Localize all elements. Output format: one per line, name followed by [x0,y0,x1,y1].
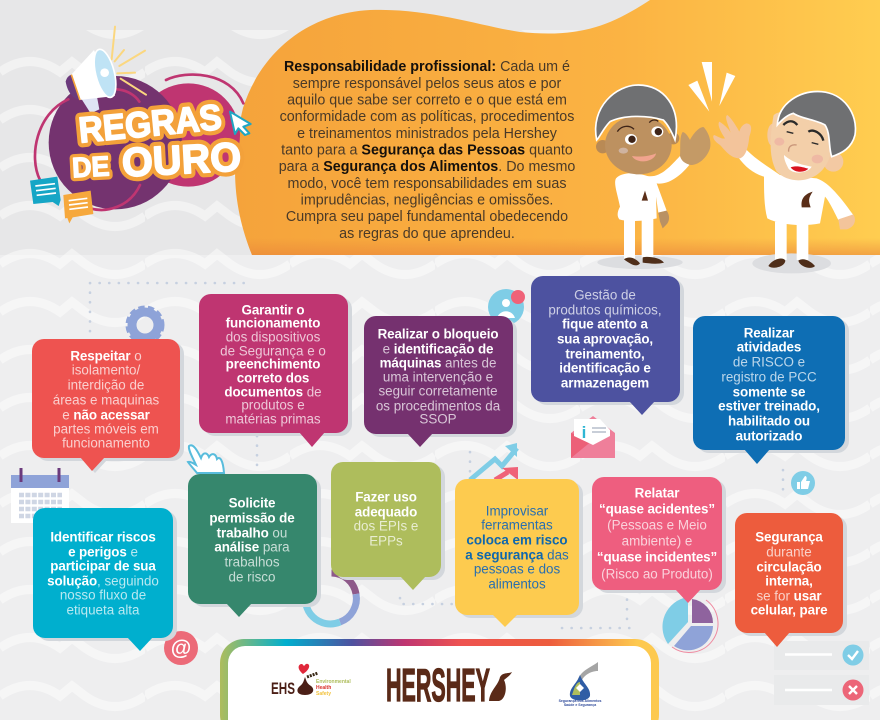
panel: Gestão de produtos químicos: fique atento a [562,316,648,332]
logo: EHS: Health [316,685,331,691]
logo: Segurança [559,662,601,707]
panel: Realizar atividades de risco: somente se [733,384,805,400]
panel: Relatar quase acidentes: “quase acidentes” [599,502,715,516]
panel: Gestão de produtos químicos: Gestão de [574,288,636,302]
icon: cursor arrow [230,112,251,135]
intro text: Responsabilidade profissional: Cumpra seu papel fundamental obedecendo [286,209,568,225]
intro text: Responsabilidade profissional: Responsabilidade profissional: Cada um é [284,59,570,75]
panel: Fazer uso adequado: EPPs [369,534,403,548]
panel: Gestão de produtos químicos: armazenagem [561,376,649,390]
panel: Improvisar ferramentas [455,479,583,627]
panel: Solicite permissão: permissão de [209,510,295,526]
panel: Garantir o funcionamento: correto dos [237,370,309,386]
panel: Realizar atividades de risco [693,316,849,464]
panel: Realizar atividades de risco: habilitado ou [728,414,810,428]
heading: Regras de Ouro: OURO [121,133,242,186]
panel: Garantir o funcionamento: funcionamento [226,316,320,330]
panel: logo footer [220,639,659,720]
logo: Hershey: HERSHEY [386,659,490,711]
panel: Respeitar: Respeitar o [70,348,142,364]
panel: Realizar o bloqueio: uma intervenção e [383,370,493,384]
panel: Realizar atividades de risco: registro de PCC [721,370,817,384]
panel: Realizar o bloqueio: e identificação de [383,342,493,356]
panel: Solicite permissão: trabalhos [224,554,280,570]
panel: Relatar quase acidentes: “quase incidentes” [597,550,717,564]
panel: Solicite permissão: de risco [229,570,275,584]
panel: Realizar atividades de risco: estiver treinado, [718,398,820,414]
panel: Solicite permissão: trabalho ou [217,526,287,540]
intro text: Responsabilidade profissional: modo, você tem responsabilidades em suas [288,176,566,192]
panel: Realizar o bloqueio [364,316,517,447]
chart: donut [305,573,356,624]
logo: Segurança: Segurança dos Alimentos [559,699,601,703]
intro text: Responsabilidade profissional: e treinamentos ministrados pela Hershey [297,126,558,142]
panel: Identificar riscos: participar de sua [50,558,156,574]
panel: Gestão de produtos químicos: sua aprovação, [557,332,653,346]
panel: Realizar o bloqueio: máquinas antes de [380,356,496,370]
panel: Gestão de produtos químicos: treinamento, [565,346,645,362]
icon: chat bubbles [30,177,93,223]
heading: Regras de Ouro: REGRAS [77,96,223,151]
panel: Segurança durante circulação: Segurança [755,530,823,544]
panel: Fazer uso adequado: dos EPIs e [354,518,418,534]
intro text: Responsabilidade profissional: imprudências, negligências e omissões. [301,192,553,208]
icon: pointing hand [188,445,224,473]
heading: Regras de Ouro: REGRAS [77,96,223,151]
panel: Fazer uso adequado: adequado [355,504,417,520]
intro text: Responsabilidade profissional: aquilo que sabe ser correto e o que está em [287,92,567,108]
chart: pie [662,597,718,653]
panel: Segurança durante circulação: interna, [765,574,813,588]
panel: Realizar o bloqueio: seguir corretamente [378,384,498,398]
panel: Garantir o funcionamento: Garantir o [242,302,304,318]
panel: Identificar riscos [33,508,177,651]
panel: Identificar riscos: etiqueta alta [67,602,140,618]
panel: Relatar quase acidentes: (Risco ao Produto) [601,566,713,582]
panel: Relatar quase acidentes: ambiente) e [622,534,692,548]
panel: Realizar atividades de risco: de RISCO e [733,354,805,370]
icon: calendar [11,468,69,523]
panel: Segurança durante circulação: circulação [756,560,822,574]
panel: Realizar atividades de risco: atividades [737,340,801,354]
intro text: Responsabilidade profissional: tanto para a Segurança das Pessoas quanto [281,142,573,158]
icon: rising arrows [470,443,518,480]
panel: Garantir o funcionamento [199,294,352,447]
icon: gear [128,308,162,342]
panel: Respeitar: interdição de [68,378,144,392]
panel: Identificar riscos: Identificar riscos [50,530,156,544]
logo: EHS: Safety [316,691,331,697]
panel: Fazer uso adequado: Fazer uso [355,490,417,504]
intro text: Responsabilidade profissional: conformidade com as políticas, procedimentos [280,109,574,125]
badge circles [35,75,243,210]
panel: Garantir o funcionamento: preenchimento [226,356,320,372]
panel: Segurança durante circulação [735,513,847,647]
panel: Respeitar: e não acessar [62,408,151,422]
panel: Identificar riscos: nosso fluxo de [60,588,146,602]
panel: Improvisar ferramentas: Improvisar [486,504,549,518]
panel: Segurança durante circulação: celular, pare [751,602,827,618]
character: man [713,92,855,273]
intro text: Responsabilidade profissional: as regras do que aprendeu. [339,226,515,242]
panel: Gestão de produtos químicos: identificação e [559,360,651,376]
panel: Segurança durante circulação: se for usar [756,588,822,604]
intro text: Responsabilidade profissional [279,59,575,242]
panel: Realizar atividades de risco: autorizado [736,428,802,444]
icon: checklist panels [774,641,869,705]
logo: Hershey [386,659,512,711]
panel: Solicite permissão: Solicite [229,496,275,510]
panel: Identificar riscos: solução, seguindo [47,574,159,588]
icon: at sign [164,631,198,665]
panel: Gestão de produtos químicos: produtos químicos, [548,302,662,318]
logo: EHS [271,664,351,698]
icon: megaphone [66,27,146,113]
panel: Improvisar ferramentas: a segurança das [465,548,569,562]
icon: info envelope: i [582,423,586,442]
logo: Segurança: Saúde e Segurança [564,703,596,707]
panel: Segurança durante circulação: durante [766,544,812,560]
icon: user notification [488,289,525,325]
panel: Fazer uso adequado [331,462,445,590]
panel: Respeitar: funcionamento [62,436,150,450]
panel: Improvisar ferramentas: pessoas e dos [474,562,560,576]
heading: Regras de Ouro [71,96,242,186]
panel: Realizar atividades de risco: Realizar [744,326,795,340]
logo: EHS: Environmental [316,679,351,685]
spark lines [688,62,735,112]
logo: EHS: EHS [271,679,295,698]
panel: Relatar quase acidentes: Relatar [635,486,680,500]
panel: Relatar quase acidentes: (Pessoas e Meio [607,518,707,532]
icon: at sign: @ [171,637,191,660]
panel: Respeitar: isolamento/ [72,362,141,378]
orange header shape [235,0,880,255]
panel: Respeitar: partes móveis em [53,422,159,436]
panel: Garantir o funcionamento: de Segurança e o [220,344,326,358]
character: woman [596,85,710,269]
panel: Realizar o bloqueio: os procedimentos da [376,398,501,414]
icon: thumbs up [791,471,815,495]
panel: Improvisar ferramentas: alimentos [488,576,546,592]
heading: Regras de Ouro: DE [71,150,110,183]
illustration: two characters high-fiving [596,62,855,273]
icon: info envelope [571,416,615,458]
panel: Garantir o funcionamento: documentos de [224,384,322,400]
panel: Garantir o funcionamento: produtos e [241,398,305,412]
panel: Garantir o funcionamento: dos dispositivos [226,330,321,344]
panel: Realizar o bloqueio: Realizar o bloqueio [378,326,498,342]
panel: Identificar riscos: e perigos e [68,544,138,560]
intro text: Responsabilidade profissional: para a Segurança dos Alimentos. Do mesmo [279,159,575,175]
panel: Garantir o funcionamento: matérias primas [225,412,321,426]
panel: Improvisar ferramentas: coloca em risco [466,532,568,548]
panel: Relatar quase acidentes [592,477,726,603]
title badge: Regras de Ouro [30,27,251,223]
panel: Respeitar [32,339,184,473]
panel: Solicite permissão [188,474,321,617]
heading: Regras de Ouro: DE [71,150,110,183]
panel: Solicite permissão: análise para [214,540,290,554]
panel: Respeitar: áreas e maquinas [53,392,160,408]
panel: Improvisar ferramentas: ferramentas [481,518,553,532]
panel: Gestão de produtos químicos [531,276,684,415]
intro text: Responsabilidade profissional: sempre responsável pelos seus atos e por [293,76,562,92]
heading: Regras de Ouro: OURO [121,133,242,186]
panel: Realizar o bloqueio: SSOP [419,412,457,426]
